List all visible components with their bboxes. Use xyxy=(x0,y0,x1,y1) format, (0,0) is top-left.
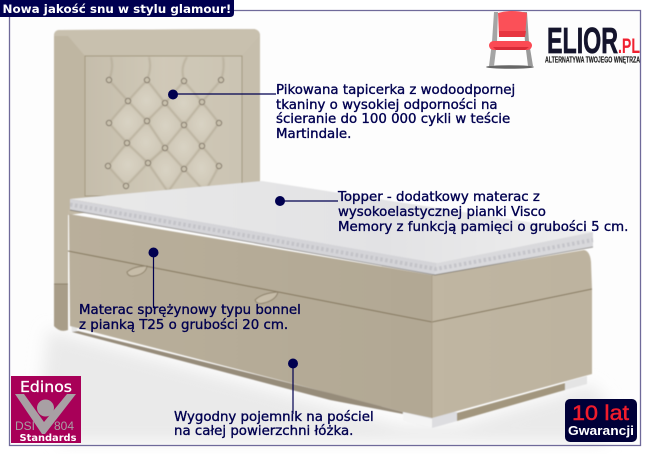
callout: upholstery: ścieranie do 100 000 cykli w teście xyxy=(276,111,510,127)
callout: topper xyxy=(275,190,628,235)
callout: topper: Memory z funkcją pamięci o grubości 5 cm. xyxy=(338,219,628,235)
callout: mattress: z pianką T25 o grubości 20 cm. xyxy=(79,317,288,333)
callout: upholstery: Martindale. xyxy=(276,127,351,142)
icon: red chair xyxy=(486,11,534,69)
legs xyxy=(71,324,587,428)
badge: 10 lat gwarancji: 10 lat xyxy=(572,402,629,425)
callout: upholstery: tkaniny o wysokiej odporności na xyxy=(276,97,498,113)
callout: topper: Topper - dodatkowy materac z xyxy=(337,190,540,205)
lid seam xyxy=(68,251,592,322)
headboard xyxy=(54,29,260,331)
badge: Edinos DSI 804: Edinos xyxy=(20,378,72,396)
callout: topper: wysokoelastycznej pianki Visco xyxy=(338,205,546,220)
badge: Edinos DSI 804 xyxy=(11,376,81,444)
strap handles xyxy=(127,266,278,304)
callout: storage: na całej powierzchni łóżka. xyxy=(174,423,353,439)
tufting folds xyxy=(108,57,224,192)
logo: elior.pl: .PL xyxy=(618,35,640,58)
badge: Edinos DSI 804: 804 xyxy=(54,419,74,433)
badge: 10 lat gwarancji xyxy=(565,399,637,442)
callout: storage xyxy=(174,358,374,439)
floor shadow xyxy=(40,330,606,442)
tufting buttons xyxy=(105,77,224,189)
badge: Edinos DSI 804: Standards xyxy=(20,433,77,444)
tufted panel xyxy=(85,56,242,196)
callout: upholstery: Pikowana tapicerka z wodoodpornej xyxy=(276,83,515,98)
badge: 10 lat gwarancji: Gwarancji xyxy=(568,423,634,438)
box base xyxy=(68,214,592,418)
topper mattress xyxy=(70,181,593,275)
bed illustration xyxy=(54,29,593,428)
callout: upholstery xyxy=(168,83,515,142)
title banner: Nowa jakość snu w stylu glamour! xyxy=(2,2,231,16)
callout: mattress xyxy=(79,248,301,333)
logo: elior.pl xyxy=(486,11,640,69)
callout: mattress: Materac sprężynowy typu bonnel xyxy=(79,303,301,318)
callout: storage: Wygodny pojemnik na pościel xyxy=(174,409,374,425)
badge: Edinos DSI 804: DSI xyxy=(15,419,35,433)
